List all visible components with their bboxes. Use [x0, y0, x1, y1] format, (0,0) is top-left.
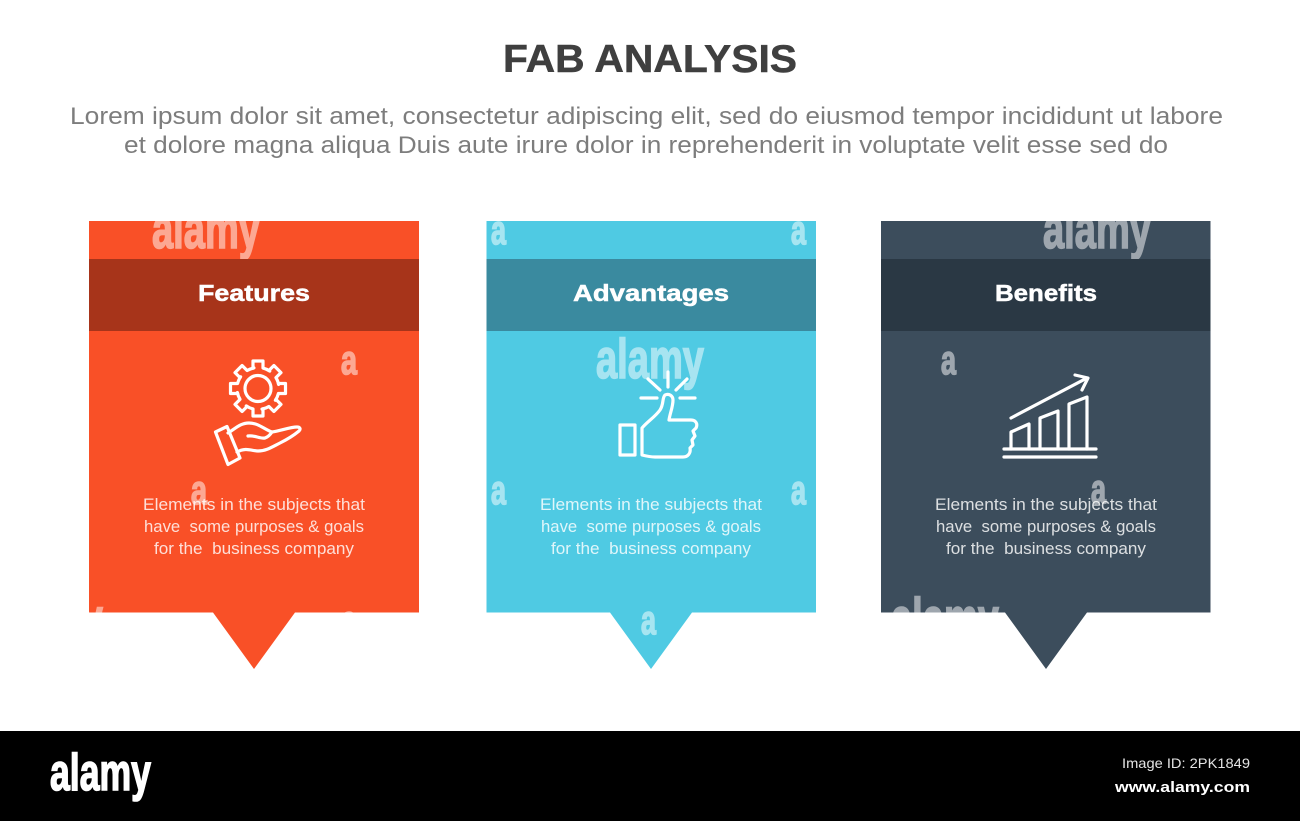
features watermarks: a: [341, 337, 358, 383]
advantages watermarks: a: [791, 207, 807, 253]
advantages watermarks: a: [491, 467, 507, 513]
advantages watermarks: a: [641, 597, 657, 643]
features header band: [89, 259, 419, 331]
advantages description: for the business company: [551, 540, 752, 558]
advantages callout shape: [486, 221, 816, 669]
features description: Elements in the subjects that: [143, 496, 365, 514]
panel: advantages: [486, 207, 816, 669]
icon: thumbs up: [620, 372, 697, 457]
features watermarks: a: [341, 597, 358, 643]
advantages watermarks: alamy: [596, 327, 704, 390]
subtitle text: [70, 103, 1223, 159]
features heading: Features: [198, 280, 310, 306]
advantages heading: Advantages: [573, 280, 729, 306]
benefits description: for the business company: [946, 540, 1147, 558]
footer bar: [0, 731, 1300, 821]
benefits description: have some purposes & goals: [936, 518, 1156, 536]
advantages watermarks: a: [791, 467, 807, 513]
panel: features: [89, 221, 419, 669]
benefits description: [935, 496, 1157, 558]
benefits watermarks: alamy: [1043, 197, 1151, 260]
image id: Image ID: 2PK1849: [1122, 755, 1250, 771]
features watermarks: [0, 197, 358, 649]
footer logo: alamy: [50, 744, 151, 802]
website: www.alamy.com: [1114, 779, 1250, 796]
advantages watermarks: a: [491, 207, 507, 253]
icon: gear in hand: [216, 361, 300, 464]
advantages watermarks: [491, 207, 807, 643]
advantages header band: [486, 259, 816, 331]
panel: benefits: [881, 197, 1210, 669]
features description: [143, 496, 365, 558]
icon: growth chart: [1004, 375, 1096, 457]
features callout shape: [89, 221, 419, 669]
benefits header band: [881, 259, 1210, 331]
subtitle text: Lorem ipsum dolor sit amet, consectetur adipiscing elit, sed do eiusmod tempor incididunt ut labore: [70, 103, 1223, 130]
benefits watermarks: alamy: [891, 586, 999, 649]
benefits callout shape: [881, 221, 1210, 669]
title: FAB ANALYSIS: [503, 38, 797, 81]
benefits heading: Benefits: [995, 280, 1097, 306]
advantages description: have some purposes & goals: [541, 518, 761, 536]
features watermarks: a: [191, 467, 208, 513]
benefits description: Elements in the subjects that: [935, 496, 1157, 514]
benefits watermarks: a: [941, 337, 957, 383]
features watermarks: alamy: [152, 197, 260, 260]
advantages description: Elements in the subjects that: [540, 496, 762, 514]
features description: for the business company: [154, 540, 355, 558]
advantages description: [540, 496, 762, 558]
subtitle text: et dolore magna aliqua Duis aute irure dolor in reprehenderit in voluptate velit esse sed do: [124, 132, 1168, 159]
features description: have some purposes & goals: [144, 518, 364, 536]
benefits watermarks: a: [1091, 466, 1107, 512]
benefits watermarks: [893, 221, 1151, 612]
